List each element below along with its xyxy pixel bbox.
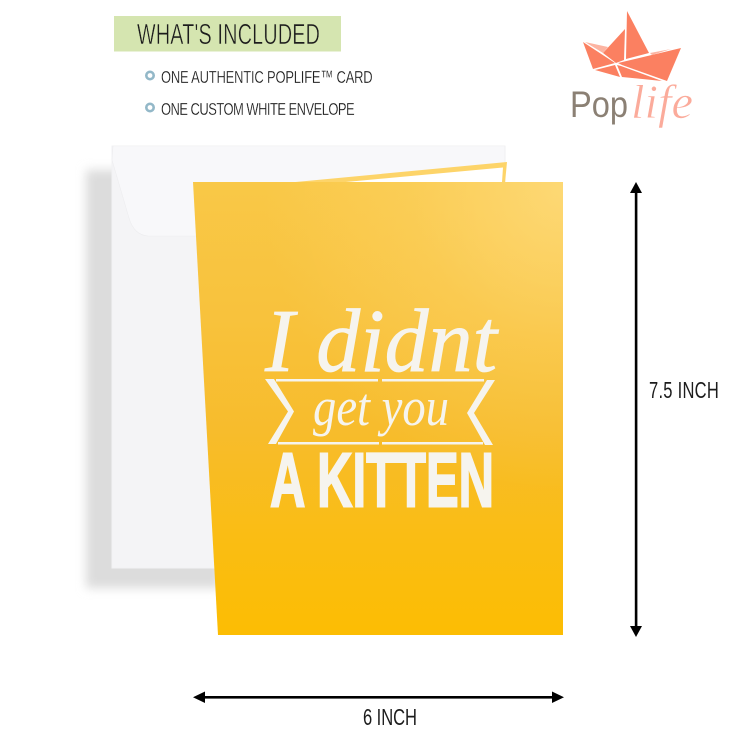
- arrow: width dimension: [193, 692, 564, 703]
- logo wordmark: life: life: [631, 76, 693, 129]
- label: 6 inch: 6 INCH: [363, 705, 417, 731]
- arrow: height dimension: [630, 182, 642, 637]
- text: A KITTEN: A KITTEN: [270, 438, 494, 524]
- banner with get you: [265, 377, 495, 445]
- panel: what's included: [114, 16, 373, 120]
- icon: paper boat: [583, 11, 681, 81]
- envelope with shadow: [86, 146, 505, 588]
- label: 7.5 inch: 7.5 INCH: [649, 378, 719, 404]
- logo: Poplife: [570, 11, 693, 129]
- greeting card: [193, 162, 563, 635]
- envelope body: [112, 146, 505, 568]
- card back panel: [285, 162, 507, 183]
- banner with get you: get you: [313, 377, 449, 437]
- text: I didnt: I didnt: [264, 292, 499, 391]
- envelope shadow: [86, 170, 221, 588]
- card message: [264, 292, 499, 524]
- envelope flap: [112, 146, 505, 236]
- list item: card: ONE AUTHENTIC POPLIFE™ CARD: [161, 68, 373, 88]
- heading: what's included: WHAT'S INCLUDED: [137, 19, 320, 51]
- logo wordmark: Pop: Pop: [570, 84, 628, 125]
- card front: [193, 182, 563, 635]
- list item: envelope: ONE CUSTOM WHITE ENVELOPE: [161, 100, 355, 120]
